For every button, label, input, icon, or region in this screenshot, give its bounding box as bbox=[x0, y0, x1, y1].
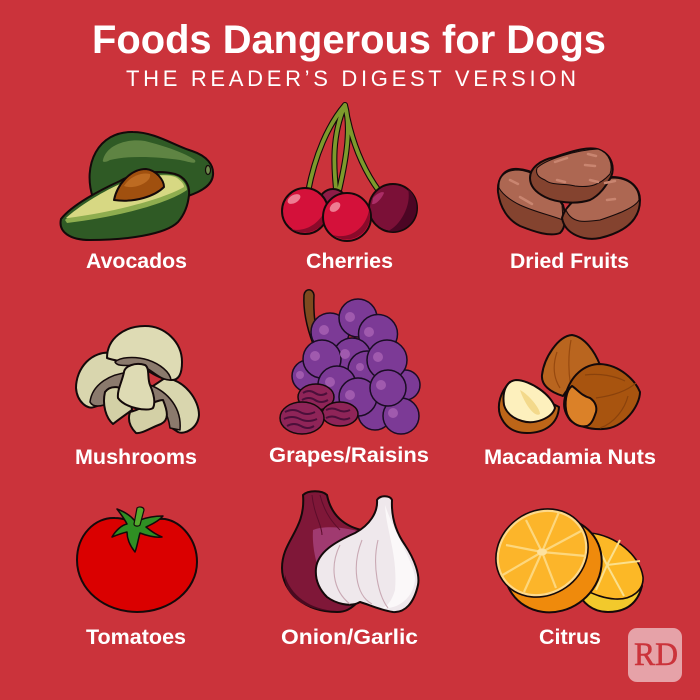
icon: onion and garlic bbox=[282, 491, 418, 612]
label: Macadamia Nuts: Macadamia Nuts bbox=[484, 446, 656, 469]
icon: macadamia nuts bbox=[499, 335, 640, 433]
icon: grapes and raisins bbox=[280, 290, 420, 434]
label: Avocados: Avocados bbox=[86, 250, 187, 273]
label: Citrus: Citrus bbox=[539, 626, 601, 649]
logo: RD badge: RD bbox=[634, 637, 678, 673]
title: Foods Dangerous for Dogs bbox=[92, 18, 606, 62]
icon: avocados bbox=[61, 132, 213, 240]
icon: tomato bbox=[77, 507, 197, 612]
label: Dried Fruits: Dried Fruits bbox=[510, 250, 629, 273]
icon: mushrooms bbox=[76, 326, 199, 433]
label: Grapes/Raisins: Grapes/Raisins bbox=[269, 444, 429, 467]
subtitle: THE READER’S DIGEST VERSION bbox=[126, 66, 576, 91]
icon: citrus bbox=[479, 491, 643, 631]
logo: RD badge bbox=[628, 628, 682, 682]
icon: dried fruits bbox=[498, 148, 640, 239]
label: Onion/Garlic: Onion/Garlic bbox=[281, 626, 418, 649]
icon: cherries bbox=[282, 105, 417, 241]
label: Tomatoes: Tomatoes bbox=[86, 626, 186, 649]
label: Mushrooms: Mushrooms bbox=[75, 446, 197, 469]
label: Cherries: Cherries bbox=[306, 250, 393, 273]
